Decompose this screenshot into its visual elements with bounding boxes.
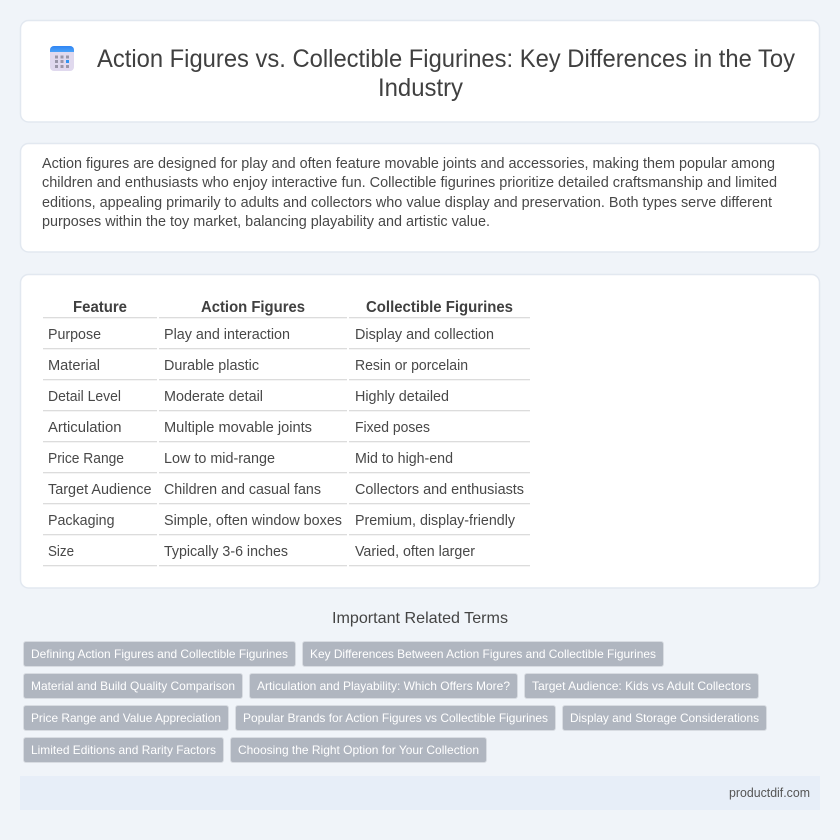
tag: [302, 642, 664, 666]
tag: Popular Brands for Action Figures vs Collectible Figurines: [243, 711, 548, 725]
row: Articulation: Fixed poses: [355, 420, 430, 436]
row: Detail Level: Highly detailed: [355, 389, 449, 405]
row: Target Audience: [48, 482, 524, 498]
row: Packaging: [48, 513, 516, 529]
row: Target Audience: Children and casual fans: [164, 482, 321, 498]
tag: [562, 706, 766, 730]
title: [97, 45, 795, 102]
tag: Articulation and Playability: Which Offers More?: [257, 679, 510, 693]
row: Detail Level: Moderate detail: [164, 389, 263, 405]
row: Articulation: Multiple movable joints: [164, 420, 312, 436]
row: Articulation: Articulation: [48, 420, 122, 436]
tag: Display and Storage Considerations: [570, 711, 759, 725]
row: Material: [48, 358, 468, 374]
heading: important related terms: Important Related Terms: [332, 610, 508, 627]
text block: introduction: Action figures are designed for play and often feature movable joints and accessories, making them popular among: [42, 156, 775, 172]
footer: productdif.com: [729, 786, 810, 800]
tag: [524, 674, 758, 698]
row: Material: Resin or porcelain: [355, 358, 468, 374]
tag: [24, 674, 242, 698]
tag: Key Differences Between Action Figures and Collectible Figurines: [310, 647, 656, 661]
table header: Collectible Figurines: [366, 299, 513, 316]
icon: calendar: [50, 46, 74, 71]
row: Target Audience: Target Audience: [48, 482, 152, 498]
text block: introduction: editions, appealing primarily to adults and collectors who value display and preservation. Both types serve different: [42, 195, 772, 211]
panel: comparison table: [20, 274, 820, 588]
title: Industry: [378, 74, 463, 102]
tag: Limited Editions and Rarity Factors: [31, 743, 216, 757]
row: Purpose: Display and collection: [355, 327, 494, 343]
row: Size: Varied, often larger: [355, 544, 475, 560]
row: Size: [48, 544, 475, 560]
row: Purpose: Purpose: [48, 327, 101, 343]
row: Price Range: Mid to high-end: [355, 451, 453, 467]
row: Price Range: Low to mid-range: [164, 451, 275, 467]
table header: Action Figures: [201, 299, 305, 316]
tag: [250, 674, 518, 698]
tag: [230, 738, 486, 762]
tag: [24, 738, 224, 762]
row: Packaging: Premium, display-friendly: [355, 513, 516, 529]
tag: Defining Action Figures and Collectible Figurines: [31, 647, 288, 661]
text block: introduction: purposes within the toy market, balancing playability and artistic value.: [42, 214, 490, 230]
tag: [236, 706, 556, 730]
row: Packaging: Simple, often window boxes: [164, 513, 342, 529]
footer: [20, 776, 820, 810]
row: Articulation: [48, 420, 430, 436]
row: Detail Level: [48, 389, 449, 405]
tag: Material and Build Quality Comparison: [31, 679, 235, 693]
row: Material: Material: [48, 358, 100, 374]
tag: Target Audience: Kids vs Adult Collectors: [532, 679, 751, 693]
table header: [73, 299, 513, 316]
tag: [24, 706, 228, 730]
text block: introduction: children and enthusiasts who enjoy interactive fun. Collectible figurines prioritize detailed craftsmanship and limited: [42, 175, 777, 191]
row: Price Range: [48, 451, 453, 467]
title: Action Figures vs. Collectible Figurines: Key Differences in the Toy: [97, 45, 795, 73]
row: Material: Durable plastic: [164, 358, 259, 374]
tag: Price Range and Value Appreciation: [31, 711, 221, 725]
row: Detail Level: Detail Level: [48, 389, 121, 405]
row: Packaging: Packaging: [48, 513, 114, 529]
row: Price Range: Price Range: [48, 451, 124, 467]
row: Purpose: Play and interaction: [164, 327, 290, 343]
panel: introduction: [20, 144, 820, 252]
panel: header: [20, 20, 820, 122]
row: Size: Size: [48, 544, 74, 560]
tag: Choosing the Right Option for Your Collection: [238, 743, 479, 757]
text block: introduction: [42, 156, 777, 230]
table header: Feature: [73, 299, 127, 316]
row: Size: Typically 3-6 inches: [164, 544, 288, 560]
row: Purpose: [48, 327, 494, 343]
tags: related terms: [24, 642, 766, 762]
tag: [24, 642, 296, 666]
row: Target Audience: Collectors and enthusiasts: [355, 482, 524, 498]
